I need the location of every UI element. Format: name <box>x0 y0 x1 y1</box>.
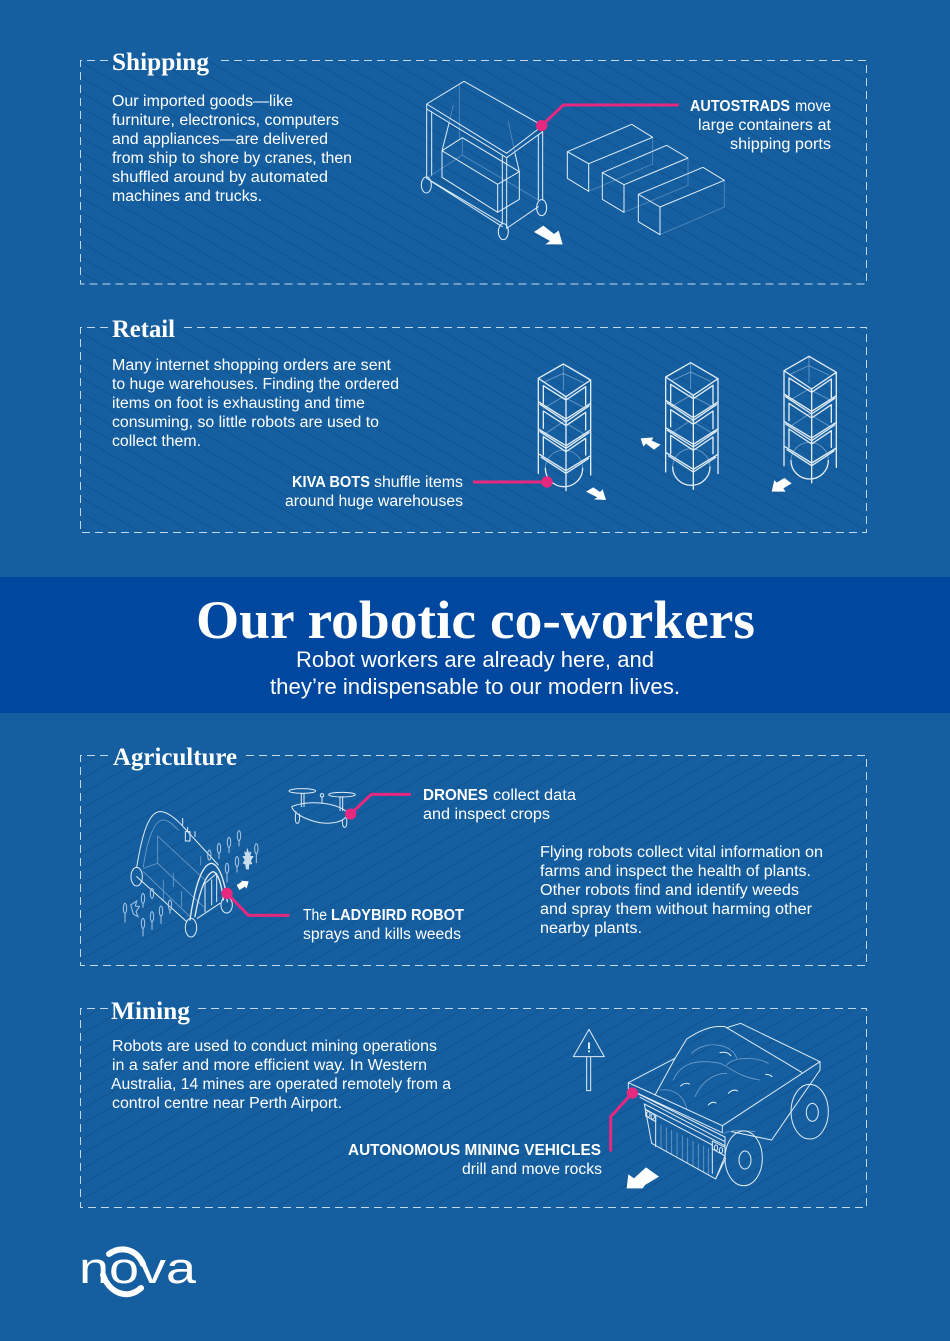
illustration: kiva bots <box>538 356 836 500</box>
text block: shipping description: and appliances—are delivered <box>112 131 328 148</box>
subtitle: they’re indispensable to our modern lives. <box>270 674 680 699</box>
text block: mining description: control centre near Perth Airport. <box>112 1095 342 1112</box>
text block: retail description: collect them. <box>112 433 201 450</box>
text block: shipping description: machines and trucks. <box>112 188 262 205</box>
panel: retail <box>80 316 866 532</box>
callout: autostrads <box>690 98 832 153</box>
text block: shipping description <box>112 93 352 205</box>
text block: retail description <box>112 357 399 450</box>
heading: retail: Retail <box>112 316 175 343</box>
logo: nova: nova <box>79 1244 197 1293</box>
illustration: ladybird robot <box>123 812 258 937</box>
text block: agriculture description: and spray them without harming other <box>540 901 812 918</box>
callout: kiva bots: KIVA BOTS <box>292 474 370 491</box>
text block: mining description: in a safer and more efficient way. In Western <box>112 1057 427 1074</box>
heading: shipping: Shipping <box>112 49 209 76</box>
callout line: drones <box>345 794 411 820</box>
panel: shipping <box>80 49 866 284</box>
title: Our robotic co-workers <box>196 590 755 650</box>
text block: mining description: Australia, 14 mines are operated remotely from a <box>111 1076 451 1093</box>
panel: agriculture <box>80 744 866 966</box>
callout: ladybird robot <box>303 907 465 943</box>
callout: autonomous mining vehicles <box>348 1142 602 1178</box>
callout: autostrads: move <box>795 98 831 115</box>
callout: kiva bots <box>285 474 463 510</box>
text block: mining description <box>111 1038 451 1112</box>
callout line: autostrads <box>536 105 679 131</box>
callout: ladybird robot: sprays and kills weeds <box>303 926 461 943</box>
illustration: autostrad and containers <box>421 81 724 244</box>
text block: retail description: items on foot is exhausting and time <box>112 395 365 412</box>
text block: agriculture description: farms and inspect the health of plants. <box>540 863 811 880</box>
text block: retail description: to huge warehouses. Finding the ordered <box>112 376 399 393</box>
heading: agriculture: Agriculture <box>113 744 237 771</box>
subtitle <box>270 647 680 699</box>
text block: shipping description: from ship to shore by cranes, then <box>112 150 352 167</box>
text block: agriculture description <box>540 844 823 937</box>
callout: ladybird robot: LADYBIRD ROBOT <box>331 907 465 924</box>
callout: kiva bots: shuffle items <box>374 474 463 491</box>
callout line: ladybird robot <box>221 888 289 915</box>
callout: kiva bots: around huge warehouses <box>285 493 463 510</box>
callout: drones <box>423 787 576 823</box>
panel: mining <box>80 998 866 1208</box>
text block: agriculture description: Other robots find and identify weeds <box>540 882 799 899</box>
callout: drones: collect data <box>493 787 576 804</box>
callout: autostrads: shipping ports <box>730 136 831 153</box>
callout: drones: DRONES <box>423 787 488 804</box>
text block: shipping description: shuffled around by automated <box>112 169 328 186</box>
heading: mining: Mining <box>111 998 191 1025</box>
text block: agriculture description: Flying robots collect vital information on <box>540 844 823 861</box>
illustration: mining truck <box>627 1023 828 1188</box>
text block: retail description: Many internet shopping orders are sent <box>112 357 392 374</box>
callout: ladybird robot: The <box>303 907 327 924</box>
icon: warning sign <box>573 1029 604 1091</box>
text block: shipping description: Our imported goods—like <box>112 93 293 110</box>
callout: drones: and inspect crops <box>423 806 550 823</box>
text block: mining description: Robots are used to conduct mining operations <box>112 1038 437 1055</box>
subtitle: Robot workers are already here, and <box>296 647 654 672</box>
text block: retail description: consuming, so little robots are used to <box>112 414 379 431</box>
callout: autonomous mining vehicles: AUTONOMOUS MINING VEHICLES <box>348 1142 601 1159</box>
callout: autonomous mining vehicles: drill and move rocks <box>462 1161 602 1178</box>
callout: autostrads: AUTOSTRADS <box>690 98 790 115</box>
illustration: drone <box>289 789 355 827</box>
callout line: kiva bots <box>473 476 553 488</box>
callout line: mining vehicles <box>611 1087 638 1152</box>
text block: agriculture description: nearby plants. <box>540 920 642 937</box>
text block: shipping description: furniture, electronics, computers <box>112 112 339 129</box>
banner <box>0 577 950 713</box>
callout: autostrads: large containers at <box>698 117 832 134</box>
